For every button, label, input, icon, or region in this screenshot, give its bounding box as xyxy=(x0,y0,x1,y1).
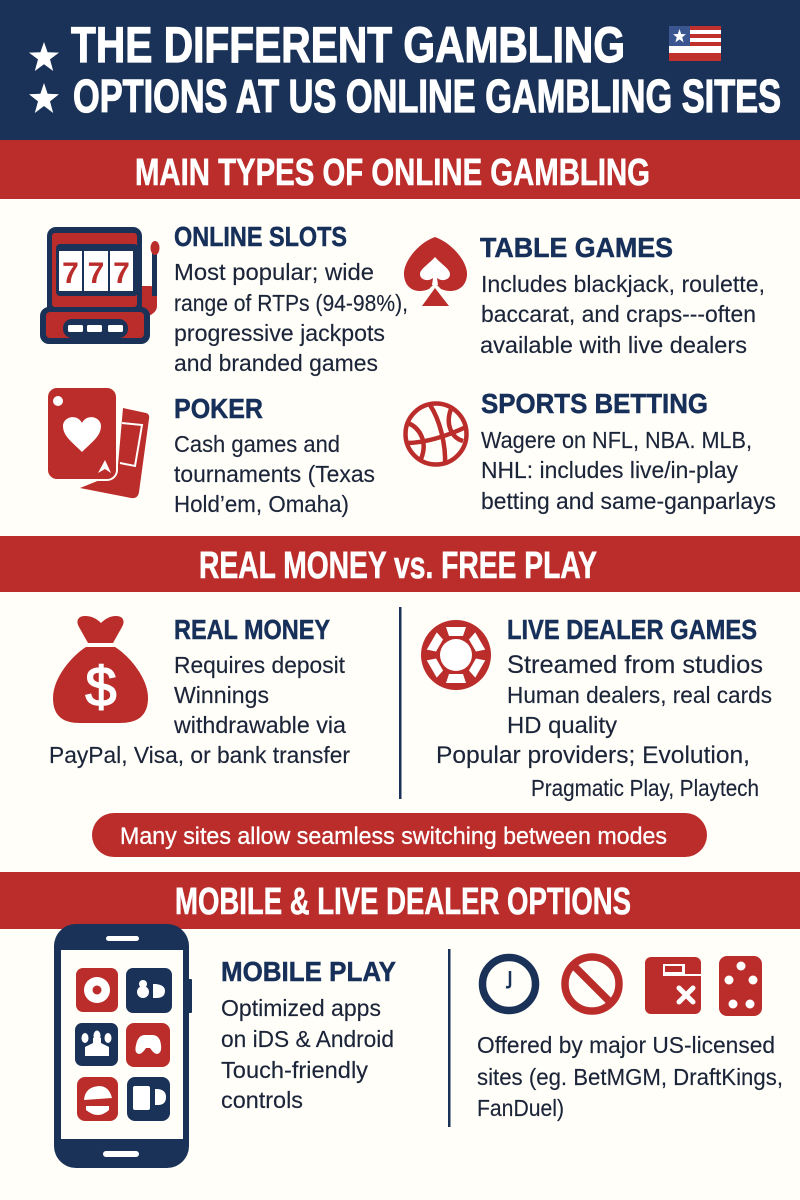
text: mobile play description: on iDS & Android xyxy=(221,1026,394,1052)
heading: table games: TABLE GAMES xyxy=(480,232,673,263)
section heading: main types: MAIN TYPES OF ONLINE GAMBLING xyxy=(135,152,650,194)
icon: playing cards xyxy=(47,387,149,498)
panel: table games xyxy=(404,232,765,358)
icon: slot machine: 7 xyxy=(113,257,130,290)
section heading: mobile and live dealer: MOBILE & LIVE DEALER OPTIONS xyxy=(175,881,631,923)
heading: poker: POKER xyxy=(174,393,263,424)
text: licensed sites description: FanDuel) xyxy=(477,1095,564,1121)
icon: money bag xyxy=(53,616,148,723)
icon: spade xyxy=(404,237,467,306)
panel: mobile play xyxy=(54,924,396,1168)
text: online slots description: range of RTPs (94-98%), xyxy=(174,290,408,316)
panel: online slots xyxy=(40,221,408,376)
section heading: real money vs free play: REAL MONEY vs. FREE PLAY xyxy=(199,545,597,587)
text: real money description: PayPal, Visa, or bank transfer xyxy=(49,742,350,768)
section heading: mobile and live dealer xyxy=(0,872,800,929)
panel: poker xyxy=(47,387,375,517)
text: real money description: withdrawable via xyxy=(173,712,347,738)
text: real money description: Winnings xyxy=(174,682,269,708)
panel: live dealer games xyxy=(421,614,772,801)
panel: live dealer options xyxy=(477,956,783,1121)
icon: die xyxy=(719,956,762,1016)
text: poker description: Hold’em, Omaha) xyxy=(174,491,349,517)
panel: sports betting xyxy=(406,388,776,514)
icon: clock xyxy=(482,958,536,1010)
text: licensed sites description: sites (eg. BetMGM, DraftKings, xyxy=(477,1064,783,1090)
text: sports betting description: NHL: includes live/in-play xyxy=(481,457,738,483)
text: real money description: Requires deposit xyxy=(174,652,345,678)
text: real money description xyxy=(49,652,350,768)
text: mobile play description: Optimized apps xyxy=(221,995,381,1021)
title xyxy=(71,17,781,122)
heading: live dealer games: LIVE DEALER GAMES xyxy=(507,614,757,645)
text: online slots description xyxy=(174,259,408,376)
text: online slots description: Most popular; wide xyxy=(174,259,374,285)
icon: money bag: $ xyxy=(85,655,117,718)
panel: real money xyxy=(49,614,350,768)
text: live dealer description: Popular providers; Evolution, xyxy=(436,742,750,769)
text: online slots description: and branded games xyxy=(174,350,378,376)
icon: slot machine: 7 xyxy=(88,257,104,290)
icon: card box xyxy=(645,957,701,1014)
text: mobile play description: controls xyxy=(221,1087,303,1113)
icon: casino chip xyxy=(421,620,491,690)
text: live dealer description: Human dealers, real cards xyxy=(507,682,772,708)
text: table games description: Includes blackjack, roulette, xyxy=(481,271,765,297)
header banner xyxy=(0,0,800,140)
icon: basketball xyxy=(406,404,466,465)
text: licensed sites description xyxy=(477,1032,783,1121)
heading: online slots: ONLINE SLOTS xyxy=(174,221,347,252)
text: poker description: Cash games and xyxy=(174,431,340,457)
icon: star bullet line 1 xyxy=(29,42,59,71)
text: poker description: tournaments (Texas xyxy=(174,461,375,487)
text: mobile play description xyxy=(221,995,394,1113)
text: live dealer description: HD quality xyxy=(507,712,617,738)
icon: prohibited sign xyxy=(565,957,619,1011)
text: table games description: available with live dealers xyxy=(480,332,747,358)
heading: sports betting: SPORTS BETTING xyxy=(481,388,708,419)
title: THE DIFFERENT GAMBLING xyxy=(71,17,625,73)
icon: slot machine xyxy=(40,227,160,344)
icon: star bullet line 2 xyxy=(29,83,59,113)
callout: switching modes xyxy=(92,813,707,857)
icon: slot machine: 7 xyxy=(62,257,79,290)
text: table games description xyxy=(480,271,765,358)
text: online slots description: progressive jackpots xyxy=(174,320,385,346)
text: live dealer description xyxy=(436,651,772,801)
text: table games description: baccarat, and craps---often xyxy=(481,301,756,327)
text: licensed sites description: Offered by major US-licensed xyxy=(477,1032,775,1058)
icon: smartphone with app tiles xyxy=(54,924,192,1168)
heading: mobile play: MOBILE PLAY xyxy=(221,956,396,987)
text: sports betting description xyxy=(481,427,776,514)
icon: US flag xyxy=(669,26,721,61)
text: live dealer description: Pragmatic Play, Playtech xyxy=(531,775,759,801)
section heading: main types xyxy=(0,140,800,199)
text: poker description xyxy=(174,431,375,517)
section heading: real money vs free play xyxy=(0,536,800,592)
heading: real money: REAL MONEY xyxy=(174,614,330,645)
text: mobile play description: Touch-friendly xyxy=(221,1057,368,1083)
text: sports betting description: betting and same-ganparlays xyxy=(481,488,776,514)
callout: switching modes: Many sites allow seamless switching between modes xyxy=(120,823,667,850)
text: sports betting description: Wagere on NFL, NBA. MLB, xyxy=(481,427,752,453)
text: live dealer description: Streamed from studios xyxy=(507,651,763,679)
